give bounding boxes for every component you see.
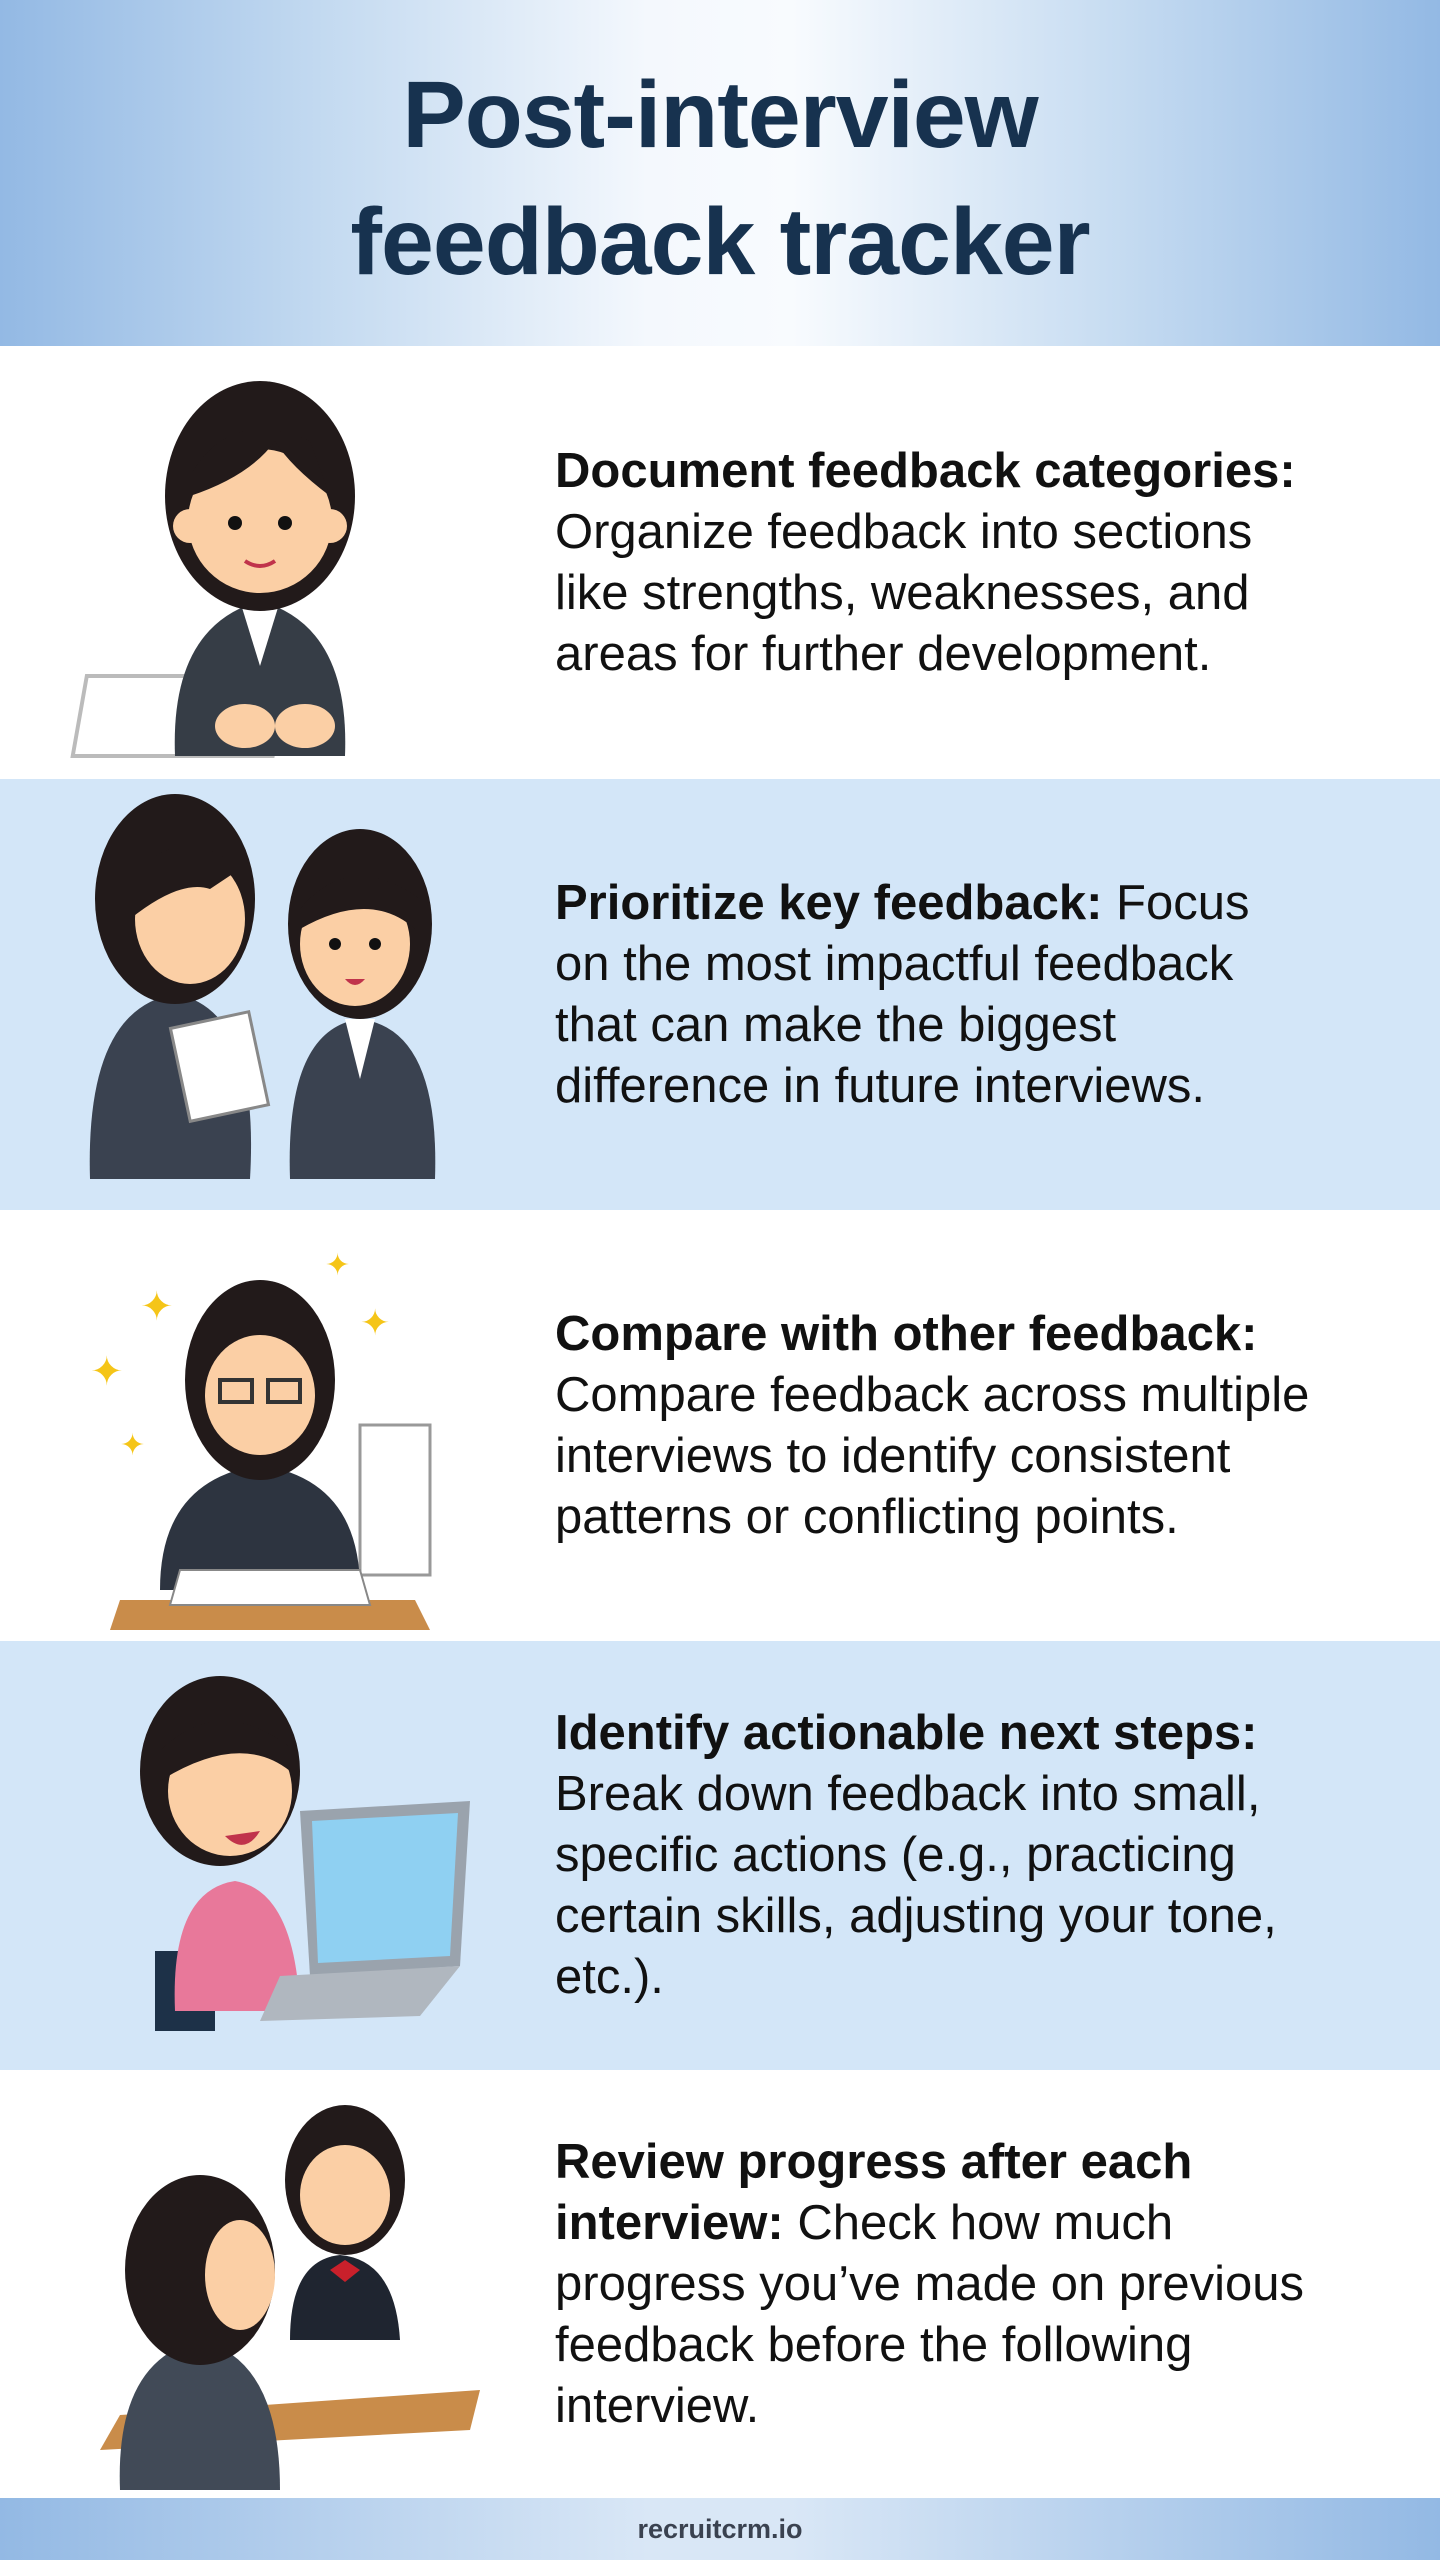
text block: Compare feedback across multiple xyxy=(555,1368,1309,1422)
illustration: interview at table xyxy=(100,2105,480,2490)
text block: feedback before the following xyxy=(555,2318,1192,2372)
text block: like strengths, weaknesses, and xyxy=(555,566,1250,620)
title xyxy=(350,62,1090,295)
text block: specific actions (e.g., practicing xyxy=(555,1828,1236,1882)
text block: interview: Check how much xyxy=(555,2196,1173,2250)
header xyxy=(0,0,1440,346)
text block: etc.). xyxy=(555,1950,664,2004)
footer: recruitcrm.io xyxy=(637,2514,803,2544)
illustration: woman at desk with papers: ✦ xyxy=(120,1429,145,1462)
illustration: woman with laptop xyxy=(140,1676,470,2031)
text block xyxy=(555,444,1296,680)
illustration: woman at desk with papers: ✦ xyxy=(140,1285,174,1329)
panel: prioritize key feedback xyxy=(0,779,1440,1210)
panel: compare with other feedback xyxy=(90,1249,1309,1630)
text block: on the most impactful feedback xyxy=(555,936,1233,990)
panel: review progress xyxy=(100,2105,1304,2490)
text block: Break down feedback into small, xyxy=(555,1767,1260,1821)
text block: Prioritize key feedback: Focus xyxy=(555,876,1249,930)
text block: Review progress after each xyxy=(555,2134,1192,2188)
text block: Organize feedback into sections xyxy=(555,504,1252,558)
text block: certain skills, adjusting your tone, xyxy=(555,1889,1277,1943)
text block: difference in future interviews. xyxy=(555,1058,1205,1112)
text block: interviews to identify consistent xyxy=(555,1428,1230,1482)
text block: progress you’ve made on previous xyxy=(555,2256,1304,2310)
title: feedback tracker xyxy=(350,189,1090,295)
text block: that can make the biggest xyxy=(555,998,1116,1052)
text block xyxy=(555,876,1249,1112)
panel: document feedback categories xyxy=(70,381,1296,758)
title: Post-interview xyxy=(402,62,1038,168)
text block: Document feedback categories: xyxy=(555,444,1296,498)
text block xyxy=(555,2134,1304,2432)
text block: areas for further development. xyxy=(555,626,1211,680)
footer xyxy=(0,2498,1440,2560)
illustration: woman at desk with papers: ✦ xyxy=(325,1249,350,1282)
text block: patterns or conflicting points. xyxy=(555,1490,1179,1544)
illustration: woman writing xyxy=(70,381,355,758)
panel: identify actionable next steps xyxy=(0,1641,1440,2070)
illustration: woman at desk with papers xyxy=(90,1249,432,1630)
illustration: woman at desk with papers: ✦ xyxy=(90,1350,124,1394)
text block: interview. xyxy=(555,2378,759,2432)
text block: Compare with other feedback: xyxy=(555,1306,1257,1360)
text block xyxy=(555,1306,1309,1544)
text block: Identify actionable next steps: xyxy=(555,1706,1258,1760)
illustration: two women reviewing papers xyxy=(90,794,436,1179)
illustration: woman at desk with papers: ✦ xyxy=(360,1302,390,1343)
text block xyxy=(555,1706,1277,2004)
